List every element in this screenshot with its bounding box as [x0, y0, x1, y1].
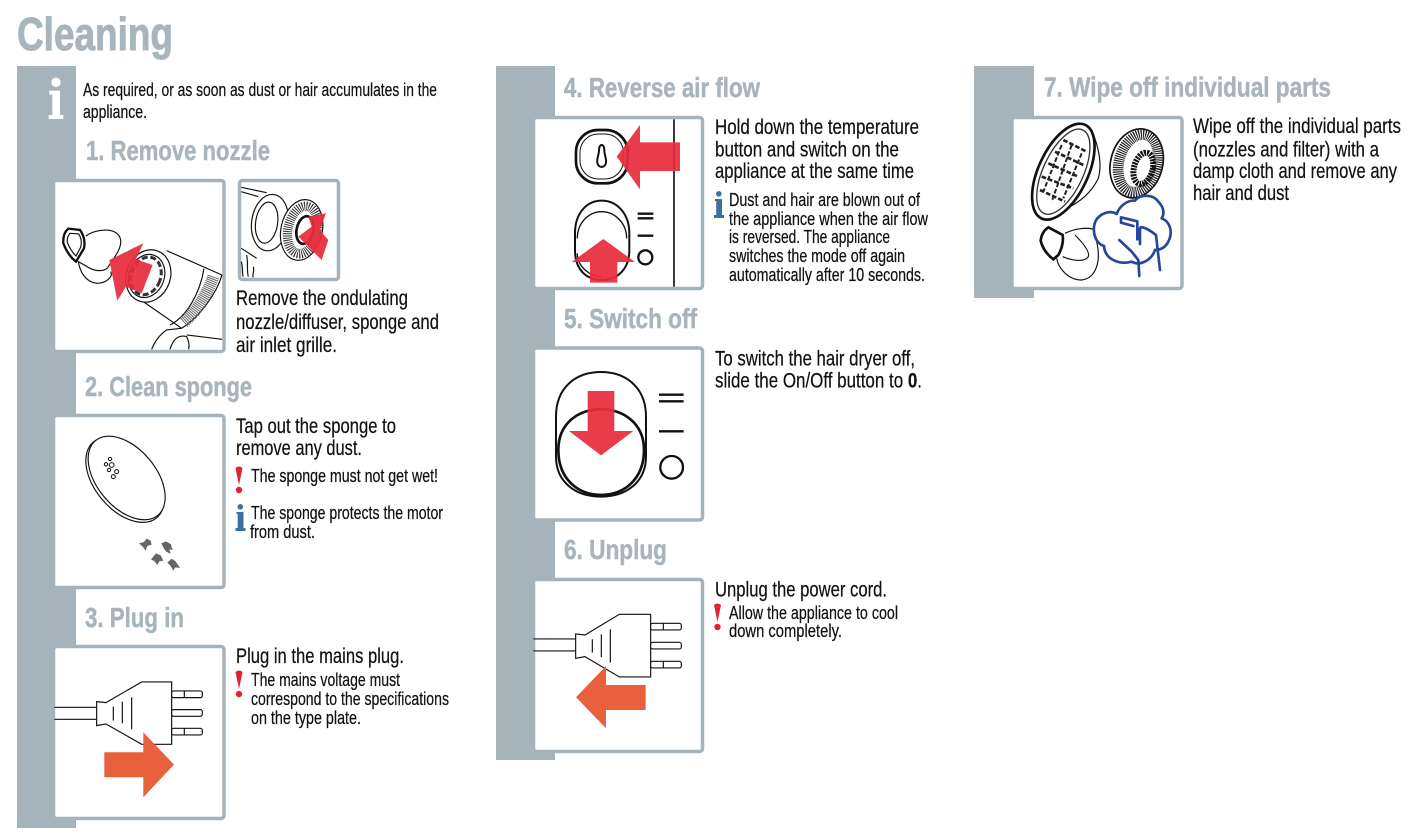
text: step 5 instructions: To switch the hair dryer off, [715, 348, 915, 370]
text: step 2 instructions [236, 415, 396, 460]
info text: reversed air flow: the appliance when the air flow [729, 209, 929, 229]
heading: step 4: 4. Reverse air flow [564, 72, 760, 103]
image: sponge and dust [54, 416, 224, 588]
text: step 7 instructions: hair and dust [1193, 182, 1289, 205]
text: step 7 instructions [1193, 115, 1401, 205]
intro note [83, 80, 437, 122]
icon: blue info [714, 191, 724, 218]
image: slider switch off [534, 348, 702, 520]
sidebar band middle [496, 66, 555, 760]
image: remove nozzle main [54, 180, 224, 352]
warning text: cool down: Allow the appliance to cool [729, 603, 898, 623]
panel: left column [17, 66, 449, 828]
text: step 1 instructions [236, 287, 439, 357]
info text: sponge: The sponge protects the motor [251, 503, 443, 523]
heading: step 1: 1. Remove nozzle [86, 135, 270, 166]
warning text: sponge: The sponge must not get wet! [251, 466, 438, 486]
text: step 5 instructions [715, 348, 922, 392]
text: step 6 instruction: Unplug the power cord. [715, 578, 887, 602]
sidebar band right [974, 66, 1034, 298]
info text: reversed air flow [729, 190, 929, 285]
icon: white info i [49, 78, 63, 119]
info text: reversed air flow: automatically after 10 seconds. [729, 265, 925, 285]
icon: red warning [236, 466, 242, 493]
text: step 4 instructions: Hold down the temperature [715, 116, 919, 139]
icon: red warning [714, 604, 721, 630]
text: step 1 instructions: Remove the ondulating [236, 287, 408, 310]
intro note: As required, or as soon as dust or hair accumulates in the [83, 80, 437, 100]
info text: reversed air flow: Dust and hair are blown out of [729, 190, 921, 210]
warning text: mains voltage: correspond to the specifications [251, 689, 449, 709]
info text: reversed air flow: is reversed. The appliance [729, 227, 890, 247]
text: step 4 instructions: appliance at the same time [715, 160, 914, 183]
warning text: mains voltage: The mains voltage must [251, 670, 400, 690]
warning text: cool down: down completely. [729, 621, 842, 641]
intro note: appliance. [83, 102, 147, 122]
text: step 3 instruction: Plug in the mains plug. [236, 645, 404, 668]
image: temperature button and slider [534, 118, 702, 288]
text: step 4 instructions [715, 116, 919, 183]
info text: sponge [250, 503, 443, 542]
heading: step 7: 7. Wipe off individual parts [1044, 72, 1331, 102]
icon: red warning [236, 670, 242, 697]
text: step 2 instructions: remove any dust. [236, 437, 362, 460]
title: Cleaning [17, 8, 173, 60]
text: step 1 instructions: nozzle/diffuser, sponge and [236, 311, 439, 334]
text: step 1 instructions: air inlet grille. [236, 334, 337, 357]
text: step 4 instructions: button and switch on the [715, 138, 899, 162]
warning text: cool down [729, 603, 898, 641]
warning text: mains voltage [251, 670, 449, 728]
panel: right column [974, 66, 1401, 298]
sidebar band left [17, 66, 76, 828]
text: step 5 instructions: slide the On/Off button to 0. [715, 370, 922, 392]
text: step 2 instructions: Tap out the sponge to [236, 415, 396, 438]
image: plug in with arrow [54, 646, 224, 818]
warning text: mains voltage: on the type plate. [251, 708, 361, 728]
info text: reversed air flow: switches the mode off again [729, 246, 905, 266]
info text: sponge: from dust. [250, 522, 315, 542]
icon: blue info [236, 504, 246, 531]
image: individual parts and cloth [1012, 114, 1182, 288]
heading: step 6: 6. Unplug [564, 534, 667, 565]
panel: middle column [496, 66, 929, 760]
heading: step 3: 3. Plug in [85, 602, 184, 633]
image: unplug with arrow [533, 580, 702, 752]
image: remove sponge and grille detail [240, 180, 338, 280]
heading: step 2: 2. Clean sponge [85, 371, 252, 402]
heading: step 5: 5. Switch off [564, 303, 698, 334]
